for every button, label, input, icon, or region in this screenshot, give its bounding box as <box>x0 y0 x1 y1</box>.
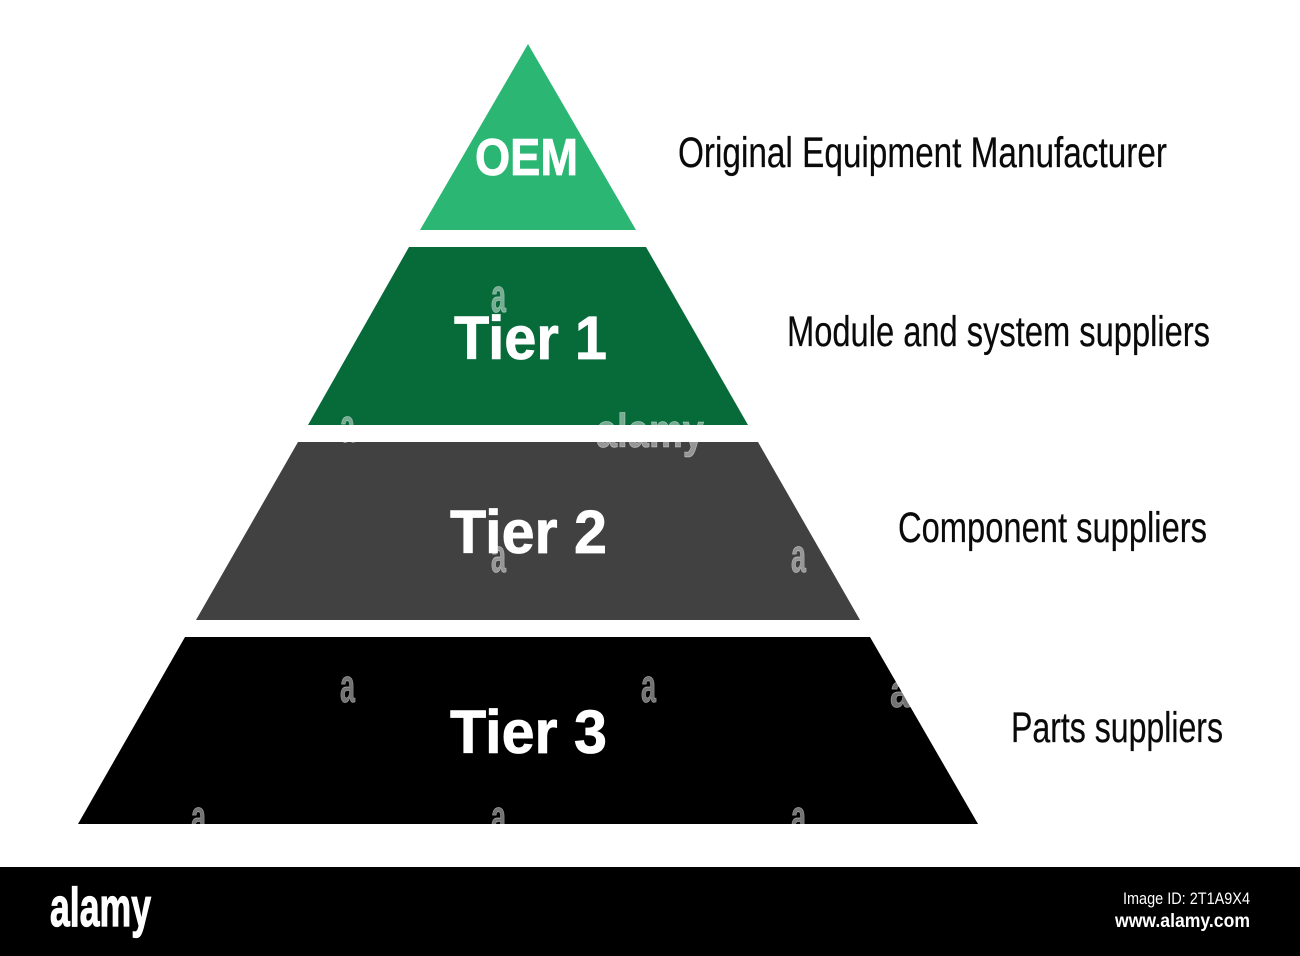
footer logo: alamy <box>50 876 151 938</box>
tier: Tier 1: Tier 1 <box>454 304 607 372</box>
watermark overlay: alamy <box>596 404 704 457</box>
tier: Tier 2 <box>196 442 860 620</box>
watermark overlay: a <box>491 790 506 843</box>
tier: Tier 2: Tier 2 <box>450 498 607 566</box>
label: Tier 2 description: Component suppliers <box>898 504 1207 552</box>
tier: Tier 3: Tier 3 <box>450 698 607 766</box>
footer bar <box>0 867 1300 956</box>
watermark overlay: a <box>641 659 656 712</box>
watermark overlay: a <box>340 659 355 712</box>
watermark overlay: a <box>491 529 506 582</box>
label: Tier 3 description: Parts suppliers <box>1011 704 1223 752</box>
website url: www.alamy.com <box>1114 911 1250 932</box>
label: OEM description: Original Equipment Manufacturer <box>678 129 1167 177</box>
tier: Tier 1 <box>308 247 748 425</box>
tier: OEM: OEM <box>475 129 578 187</box>
watermark overlay: a <box>340 399 355 452</box>
watermark overlay: a <box>491 269 506 322</box>
watermark overlay: a <box>890 664 911 717</box>
tier: Tier 3 <box>78 637 978 824</box>
watermark overlay: a <box>791 790 806 843</box>
pyramid <box>78 44 978 824</box>
tier: OEM <box>420 44 636 230</box>
image id: Image ID: 2T1A9X4 <box>1123 889 1250 908</box>
watermark overlay <box>0 269 1300 867</box>
watermark overlay: a <box>191 790 206 843</box>
watermark overlay: a <box>791 529 806 582</box>
